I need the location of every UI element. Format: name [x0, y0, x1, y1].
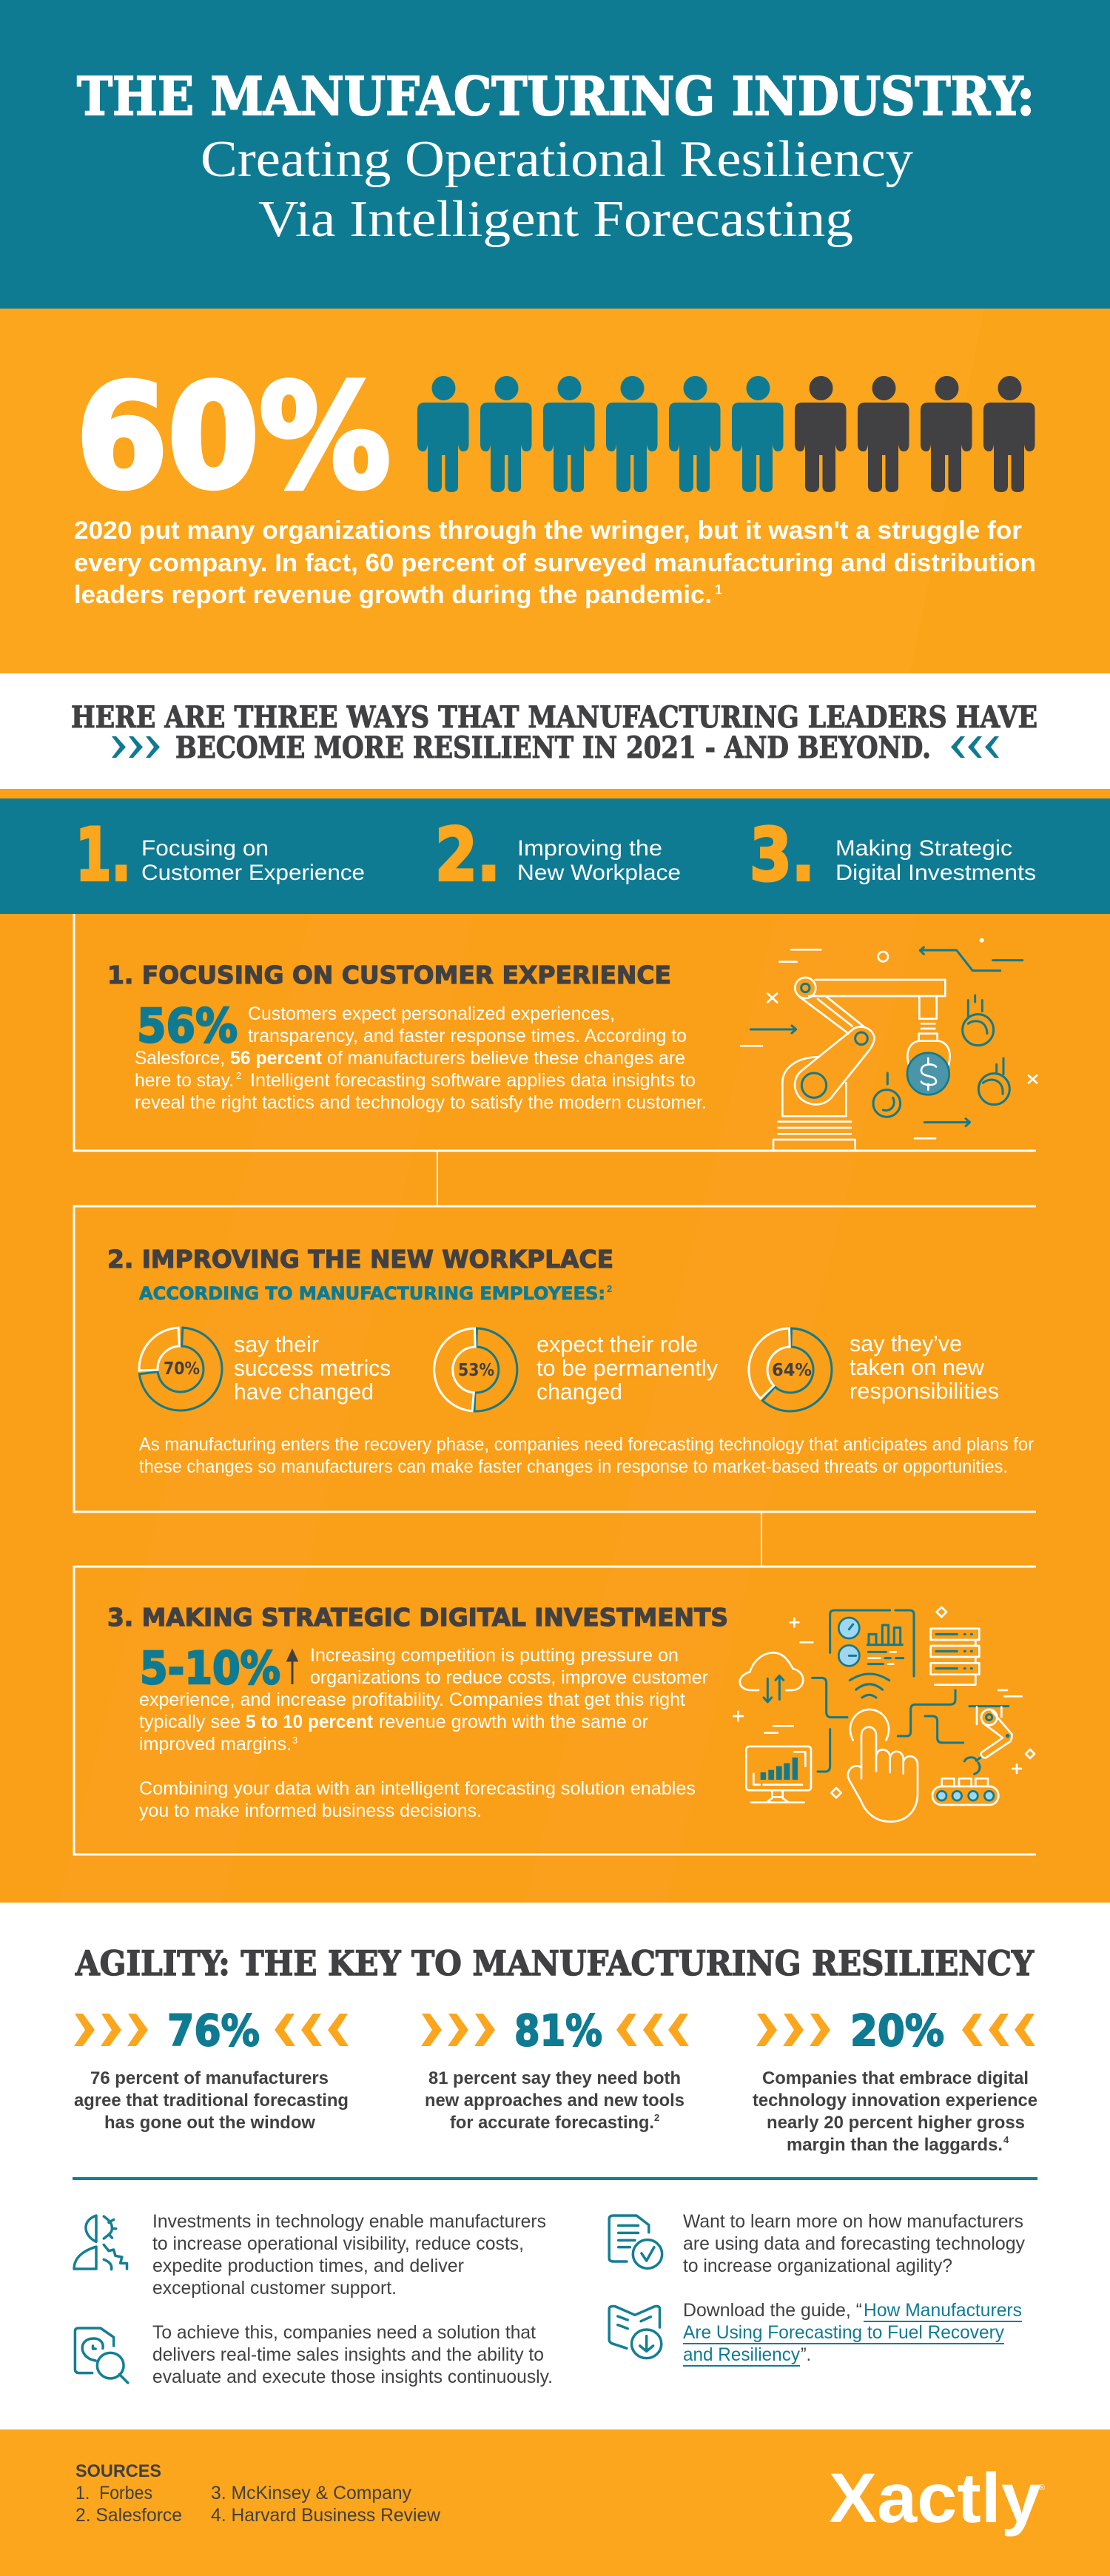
heading: section 2: 2. IMPROVING THE NEW WORKPLACE [107, 1245, 613, 1274]
arrow: connector from section 1 to section 2 [437, 1151, 438, 1206]
label: permanently changed [536, 1331, 718, 1405]
text block: download guide link [683, 2300, 1022, 2366]
heading: section 3: 3. MAKING STRATEGIC DIGITAL INVESTMENTS [107, 1603, 728, 1632]
item 1 [75, 813, 365, 898]
item 3: 3. [750, 813, 815, 898]
text block: learn more: are using data and forecasting technology [683, 2233, 1025, 2254]
text block: intro paragraph: leaders report revenue growth during the pandemic. [74, 581, 712, 609]
text: 20% description: Companies that embrace digital [762, 2068, 1029, 2088]
text block: sources: 3. McKinsey & Company [211, 2483, 411, 2503]
stat: 81%: 81% [514, 2005, 602, 2056]
panel: title header [0, 0, 1110, 309]
text block: section 1 body: Customers expect personalized experiences, [248, 1003, 615, 1024]
text block: section 1 body: reveal the right tactics and technology to satisfy the modern customer. [135, 1092, 707, 1113]
text block: section 3 body: 5 to 10 percent [246, 1712, 374, 1732]
item 1: Focusing on [141, 836, 269, 861]
panel: section 3 digital investments [74, 1567, 1036, 1854]
label: permanently changed: to be permanently [536, 1355, 718, 1381]
subheading: according to employees: ACCORDING TO MANUFACTURING EMPLOYEES: [139, 1283, 605, 1304]
heading: three ways [71, 700, 1037, 765]
text block: section 3 body [139, 1645, 708, 1821]
text block: intro paragraph [74, 517, 1036, 609]
panel: footer [0, 2429, 1110, 2576]
heading: three ways: BECOME MORE RESILIENT IN 2021 - AND BEYOND. [175, 730, 931, 765]
stat: 20% [756, 2005, 1035, 2056]
text block: sources: 1. Forbes [75, 2483, 152, 2503]
label: permanently changed: changed [536, 1379, 622, 1405]
text: 20% description: 4 [1003, 2134, 1009, 2145]
text block: solution: evaluate and execute those insights continuously. [152, 2367, 553, 2387]
text block: investments: Investments in technology enable manufacturers [152, 2211, 546, 2232]
text block: learn more [683, 2211, 1025, 2276]
stat: 81% [421, 2005, 689, 2056]
text block: intro paragraph: 1 [715, 582, 722, 597]
panel: agility section [73, 1943, 1037, 2180]
text: 81% description: 81 percent say they need both [428, 2068, 681, 2088]
text block: download guide link: How Manufacturers [864, 2300, 1022, 2321]
text block: solution: To achieve this, companies need a solution that [152, 2322, 536, 2343]
stat: 76%: 76% [167, 2005, 260, 2056]
text block: section 3 body: Combining your data with an intelligent forecasting solution enables [139, 1778, 696, 1799]
text block: intro paragraph: 2020 put many organizations through the wringer, but it wasn't a struggle for [74, 517, 1022, 545]
text block: investments: to increase operational visibility, reduce costs, [152, 2233, 524, 2254]
subheading: according to employees: 2 [607, 1283, 612, 1294]
text block: section 1 body: 2 [236, 1070, 241, 1081]
panel: orange content background [0, 789, 1110, 1903]
stat: 20%: 20% [850, 2005, 944, 2056]
text block: section 1 body [135, 1003, 707, 1113]
text block: section 1 body: of manufacturers believe these changes are [327, 1048, 685, 1069]
panel: section 1 customer experience [74, 914, 1037, 1151]
label: permanently changed: expect their role [536, 1331, 698, 1357]
stat: 76% [74, 2005, 349, 2056]
text block: learn more: to increase organizational agility? [683, 2256, 952, 2276]
text block: section 2 body: these changes so manufacturers can make faster changes in response to market-based threats or opportunities. [139, 1456, 1008, 1477]
subtitle [201, 131, 913, 248]
subtitle: Via Intelligent Forecasting [258, 191, 853, 248]
text block: sources: SOURCES [75, 2461, 161, 2481]
text block: investments [152, 2211, 546, 2298]
chart: donut 64%: 64% [772, 1361, 812, 1380]
text block: section 2 body [139, 1434, 1034, 1477]
text block: sources: 2. Salesforce [75, 2505, 182, 2526]
text block: investments: expedite production times, and deliver [152, 2256, 464, 2276]
text block: intro paragraph: every company. In fact, 60 percent of surveyed manufacturing and distribution [74, 549, 1036, 577]
text: 76% description: has gone out the window [104, 2113, 315, 2133]
logo: Xactly: ® [1039, 2483, 1045, 2492]
label: success metrics: say their [234, 1331, 319, 1357]
pictogram: ten people, six highlighted [417, 376, 1035, 492]
text block: section 3 body: experience, and increase profitability. Companies that get this right [139, 1689, 685, 1710]
item 3 [750, 813, 1036, 898]
title: THE MANUFACTURING INDUSTRY: [77, 65, 1035, 127]
text: 20% description: nearly 20 percent higher gross [767, 2113, 1025, 2133]
text block: section 3 body: Increasing competition is putting pressure on [310, 1645, 679, 1666]
icon: head with gears [74, 2216, 127, 2270]
label: success metrics: have changed [234, 1379, 374, 1405]
item 2: 2. [435, 813, 500, 898]
label: success metrics: success metrics [234, 1355, 391, 1381]
text block: section 1 body: transparency, and faster response times. According to [248, 1026, 687, 1046]
text block: learn more: Want to learn more on how manufacturers [683, 2211, 1023, 2232]
text block: solution: delivers real-time sales insights and the ability to [152, 2344, 544, 2365]
text block: section 3 body: improved margins. [139, 1734, 292, 1755]
icon: left chevrons [112, 736, 160, 758]
text block: section 1 body: Salesforce, [135, 1048, 225, 1069]
logo: Xactly: Xactly [829, 2459, 1041, 2538]
item 3: Digital Investments [835, 861, 1036, 885]
big number 60%: 60% [76, 354, 391, 520]
text block: download guide link: Are Using Forecasting to Fuel Recovery [683, 2322, 1004, 2343]
arrow: connector from section 2 to section 3 [761, 1512, 762, 1567]
chart: donut 53%: 53% [458, 1361, 494, 1380]
text block: investments: exceptional customer support. [152, 2278, 397, 2298]
text block: section 3 body: 3 [292, 1735, 297, 1746]
text: 81% description [425, 2068, 684, 2133]
text block: section 1 body: here to stay. [135, 1070, 234, 1091]
label: success metrics [234, 1331, 391, 1405]
text block: sources: 4. Harvard Business Review [211, 2505, 441, 2526]
text: 20% description [753, 2068, 1037, 2155]
stat: 56%: 56% [137, 999, 238, 1053]
text block: sources [75, 2461, 441, 2526]
subtitle: Creating Operational Resiliency [201, 131, 913, 188]
panel: section 2 new workplace [74, 1206, 1036, 1512]
panel: 60 percent statistic [0, 309, 1110, 673]
item 3: Making Strategic [835, 836, 1012, 861]
text: 81% description: new approaches and new tools [425, 2091, 684, 2111]
icon: document with check [609, 2216, 662, 2268]
illustration: digital factory touch control [733, 1607, 1035, 1822]
panel: investments and guide [74, 2211, 1025, 2387]
label: new responsibilities [850, 1331, 999, 1404]
item 2: Improving the [517, 836, 662, 861]
chart: donut 70%: 70% [164, 1359, 200, 1379]
arrow: up [288, 1651, 297, 1684]
icon: book with download [609, 2306, 662, 2358]
text block: download guide link: ”. [801, 2344, 811, 2365]
text: 20% description: margin than the laggards. [787, 2135, 1003, 2155]
stat: 5-10%: 5-10% [140, 1642, 280, 1695]
text block: solution [152, 2322, 553, 2387]
item 2 [435, 813, 681, 898]
text block: section 3 body: organizations to reduce costs, improve customer [310, 1667, 708, 1688]
illustration: robot arm holding dollar coin [741, 938, 1037, 1151]
chart: donut 70% [139, 1328, 222, 1410]
label: new responsibilities: taken on new [850, 1354, 985, 1380]
chart: donut 64% [749, 1328, 832, 1411]
text: 76% description: 76 percent of manufacturers [90, 2068, 329, 2088]
text block: section 3 body: revenue growth with the same or [379, 1712, 648, 1732]
item 1: 1. [75, 813, 131, 898]
text: 76% description: agree that traditional forecasting [74, 2091, 349, 2111]
text block: section 2 body: As manufacturing enters the recovery phase, companies need forecasting technology that anticipates and plans for [139, 1434, 1034, 1455]
text block: section 3 body: typically see [139, 1712, 240, 1732]
heading: section 1: 1. FOCUSING ON CUSTOMER EXPERIENCE [107, 961, 671, 989]
icon: document with magnifier [75, 2328, 128, 2383]
panel: three ways navigation strip [0, 798, 1110, 914]
text: 76% description [74, 2068, 349, 2133]
text block: section 1 body: 56 percent [230, 1048, 323, 1069]
text: 81% description: 2 [654, 2112, 659, 2123]
text: 20% description: technology innovation experience [753, 2091, 1037, 2111]
text block: download guide link: Download the guide, “ [683, 2300, 862, 2321]
text: 81% description: for accurate forecasting. [450, 2113, 654, 2133]
label: new responsibilities: say they’ve [850, 1331, 962, 1356]
item 1: Customer Experience [141, 861, 365, 885]
text block: section 1 body: Intelligent forecasting software applies data insights to [250, 1070, 696, 1091]
heading: agility: AGILITY: THE KEY TO MANUFACTURING RESILIENCY [75, 1943, 1035, 1983]
chart: donut 53% [434, 1328, 517, 1411]
panel: three ways banner [0, 673, 1110, 789]
text block: section 3 body: you to make informed business decisions. [139, 1800, 482, 1821]
item 2: New Workplace [517, 861, 681, 885]
label: new responsibilities: responsibilities [850, 1378, 999, 1404]
icon: right chevrons [951, 736, 999, 758]
text block: download guide link: and Resiliency [683, 2344, 800, 2365]
